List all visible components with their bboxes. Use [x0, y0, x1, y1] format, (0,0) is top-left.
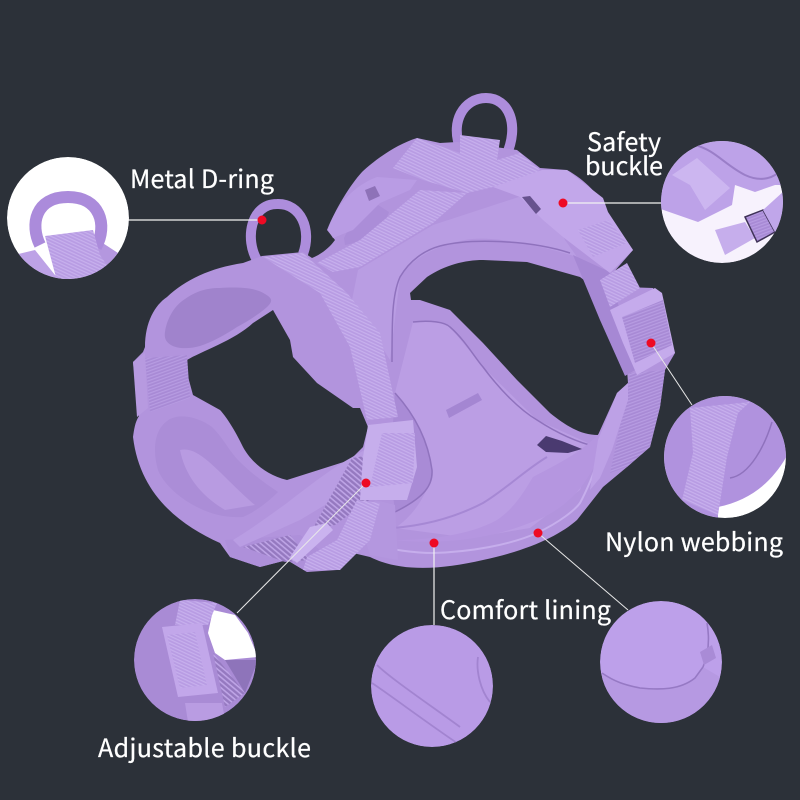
lower slide buckle: [290, 523, 333, 563]
care tag: [537, 436, 582, 453]
label: Comfort lining: Comfort lining: [440, 591, 611, 627]
safety buckle slot: [522, 196, 541, 214]
chest lower panel: [393, 420, 610, 542]
right rim: [590, 383, 628, 490]
callout: comfort lining leader right: [534, 528, 628, 610]
callout: safety buckle leader: [558, 198, 662, 208]
right side strap: [573, 255, 635, 376]
rear D-ring: [457, 98, 512, 156]
safety buckle window: [578, 220, 627, 257]
chest buckle window: [370, 433, 415, 487]
detail circle: D-ring: [7, 157, 129, 285]
label: Safety buckle: buckle: [585, 147, 663, 183]
chest left rim: [362, 500, 398, 560]
left top buckle: [328, 177, 417, 238]
slide buckle window: [622, 300, 672, 363]
rear round patch: [344, 205, 389, 245]
girth rim strap: [233, 448, 368, 547]
girth pad highlight: [180, 449, 255, 510]
neck loop pad: [165, 288, 271, 348]
chest inner panel: [395, 321, 597, 538]
right safety buckle: [493, 170, 633, 273]
callout: metal D-ring leader: [128, 216, 266, 224]
chest stitch lower: [393, 457, 547, 528]
body strap chest: [263, 253, 398, 420]
label: Safety buckle: Safety: [587, 123, 661, 159]
detail circle: safety buckle: [661, 141, 783, 263]
right upper strap: [600, 263, 640, 307]
label: Nylon webbing: Nylon webbing: [605, 523, 783, 559]
connector strap between loops: [145, 355, 190, 412]
strap below buckle: [303, 500, 380, 570]
chest crescent: [390, 393, 432, 512]
harness illustration: [133, 98, 675, 572]
callout: nylon webbing leader: [646, 338, 692, 405]
label: Metal D-ring: Metal D-ring: [130, 160, 274, 196]
braided webbing: [312, 452, 390, 530]
callout: comfort lining leader centre: [430, 538, 438, 625]
label: Adjustable buckle: Adjustable buckle: [98, 729, 311, 765]
leg opening: [410, 260, 628, 435]
top strap: [393, 135, 540, 193]
upper padded panel: [352, 190, 577, 360]
connector bar: [133, 353, 148, 417]
upper panel rim stitch: [392, 241, 570, 362]
chest rim stitch: [370, 393, 627, 553]
side strap: [610, 370, 665, 473]
front D-ring: [251, 204, 306, 260]
lower rear piece: [225, 535, 340, 572]
callout: adjustable buckle leader: [237, 478, 370, 613]
chest top rim stitch: [413, 321, 597, 447]
detail circle: adjustable buckle: [134, 599, 258, 722]
lower braid: [243, 535, 310, 562]
detail circle: comfort lining right: [600, 601, 725, 730]
body strap diagonal: [317, 190, 467, 272]
girth loop pad: [155, 416, 278, 517]
left buckle slot: [365, 186, 380, 201]
slide buckle frame: [610, 288, 675, 375]
chest buckle frame: [360, 420, 417, 500]
chest stitch inner: [395, 393, 432, 512]
detail circle: nylon webbing: [664, 396, 786, 518]
sewn logo: [446, 393, 482, 418]
harness silhouette: [133, 138, 675, 572]
detail circle: comfort lining centre: [371, 625, 493, 747]
label: Safety buckle: [585, 123, 663, 183]
neck opening: [187, 310, 368, 480]
